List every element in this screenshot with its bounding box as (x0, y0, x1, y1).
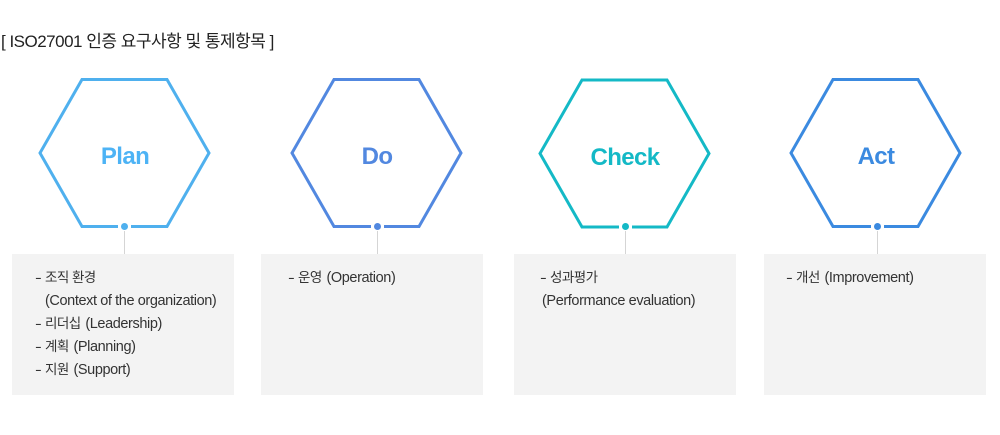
text: plan items: - (35, 270, 41, 285)
text: plan items: 계획 (Planning) (45, 339, 136, 355)
text: check items: - (540, 270, 546, 285)
hexagon: Check (540, 80, 709, 254)
text: act items: - (786, 270, 792, 285)
text: do items: - (288, 270, 294, 285)
hexagon: Plan (40, 80, 209, 254)
text: act items: 개선 (Improvement) (796, 270, 914, 286)
text: plan items (35, 270, 216, 378)
title: [ ISO27001 인증 요구사항 및 통제항목 ] (1, 32, 274, 51)
text: plan items: - (35, 362, 41, 377)
text: plan items: (Context of the organization) (45, 293, 216, 309)
hexagon: Act (791, 80, 960, 254)
text: do items: 운영 (Operation) (298, 270, 395, 286)
hexagon: Do: Do (362, 143, 392, 170)
hexagon: Do (292, 80, 461, 254)
hexagon: Check: Check (590, 144, 661, 171)
text: check items: 성과평가 (550, 270, 597, 285)
panel: act details (764, 254, 986, 395)
text: plan items: 지원 (Support) (45, 362, 130, 378)
panel: check details (514, 254, 736, 395)
text: plan items: 리더십 (Leadership) (45, 316, 162, 332)
panel: do details (261, 254, 483, 395)
hexagon: Plan: Plan (101, 143, 149, 170)
text: check items: (Performance evaluation) (542, 293, 695, 309)
text: plan items: 조직 환경 (45, 270, 96, 285)
hexagon: Act: Act (858, 143, 895, 170)
text: plan items: - (35, 339, 41, 354)
panel: plan details (12, 254, 234, 395)
text: plan items: - (35, 316, 41, 331)
text: check items (540, 270, 695, 309)
